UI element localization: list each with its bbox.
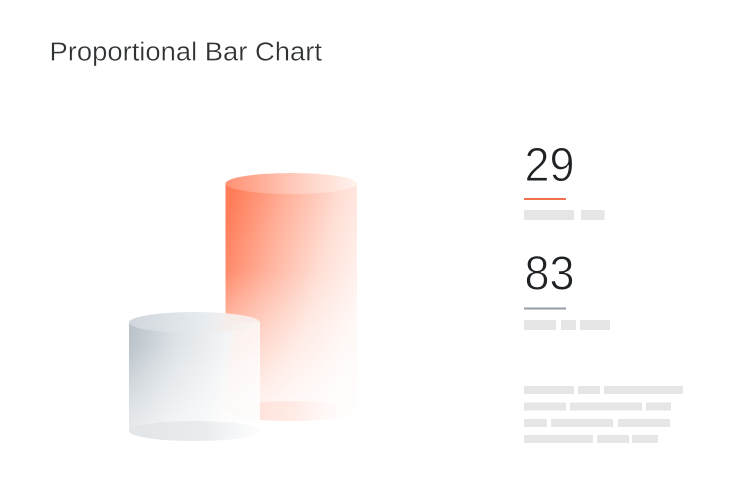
placeholder label [524,320,610,330]
orange rule [524,198,566,200]
gray rule [524,308,566,310]
placeholder paragraph [524,386,683,443]
number 83: 83 [524,248,574,300]
chart: proportional cylinders [129,173,357,441]
title: Proportional Bar Chart [50,38,322,66]
stat: 83 [524,248,610,330]
placeholder label [524,210,604,220]
cylinder: gray value 29 [129,312,260,441]
stat: 29 [524,139,604,220]
number 29: 29 [524,139,574,192]
cylinder: orange value 83 [226,173,357,421]
